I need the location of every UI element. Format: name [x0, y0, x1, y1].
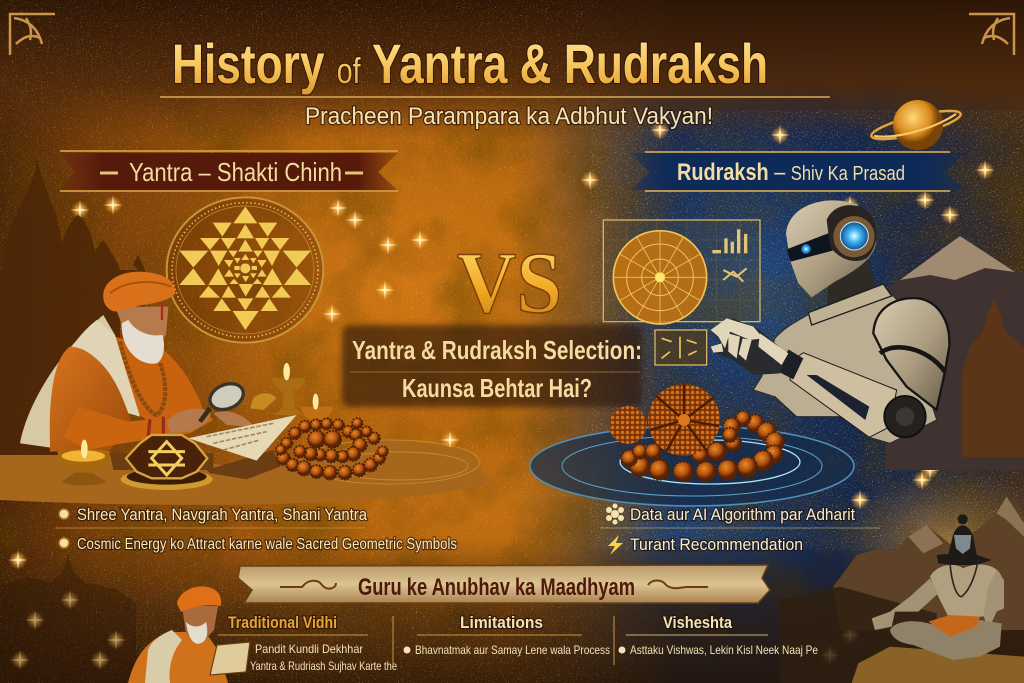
- mountain snow cap: [900, 236, 1015, 280]
- planet icon: [869, 100, 963, 150]
- rudraksh mala: left: [276, 418, 388, 480]
- zodiac wheel: [613, 231, 707, 324]
- shiva figure: [852, 514, 1024, 683]
- column heading: Limitations: [460, 613, 543, 632]
- neck: [827, 260, 875, 307]
- bangles: [148, 417, 163, 436]
- icon: sri yantra: [167, 197, 323, 343]
- divider: [55, 527, 365, 529]
- rudraksh beads: right: [609, 384, 784, 482]
- shawl front: [73, 320, 140, 417]
- hud panel: [603, 220, 760, 365]
- oil lamps: [57, 363, 333, 485]
- rock seat: [852, 647, 1024, 683]
- right bullets: [600, 504, 880, 555]
- title: History of Yantra & Rudraksh: [172, 32, 768, 95]
- torso: [930, 565, 1002, 617]
- beard: [122, 320, 164, 364]
- shawl back: [20, 315, 140, 450]
- left bullets: [55, 505, 457, 553]
- bullet text 4: Turant Recommendation: [630, 535, 803, 554]
- forearm: [790, 353, 897, 437]
- mountains: bottom right: [780, 497, 1024, 683]
- table: golden swirl surface: [0, 438, 490, 505]
- tilak: [158, 305, 165, 320]
- small rudraksh: [609, 406, 647, 444]
- arm: [63, 407, 213, 450]
- platform: blue holographic: [530, 426, 854, 506]
- face: [954, 535, 971, 554]
- bun: [958, 514, 968, 524]
- column heading: Visheshta: [663, 613, 732, 632]
- banner text: yantra: Yantra – Shakti Chinh: [129, 157, 342, 187]
- temple silhouette: right: [962, 298, 1024, 457]
- panel: central question: [342, 325, 642, 407]
- column text line 1: Pandit Kundli Dekhhar: [255, 642, 363, 656]
- small yantra plaque: [121, 435, 213, 490]
- title rule: [160, 96, 830, 98]
- large rudraksh: [648, 384, 720, 456]
- mala necklace: [120, 342, 165, 415]
- mountain: right: [885, 236, 1024, 470]
- small sage figure: [128, 586, 250, 683]
- flourish left: [280, 581, 336, 589]
- magnifying glass: [200, 379, 247, 422]
- village silhouette: bottom left: [0, 555, 136, 683]
- legs: [890, 620, 1002, 660]
- column: traditional vidhi: [218, 613, 397, 673]
- book: [110, 415, 297, 479]
- head: [786, 200, 876, 297]
- column text: Asttaku Vishwas, Lekin Kisl Neek Naaj Pe: [630, 643, 818, 657]
- hands: [167, 409, 254, 433]
- sage figure: writing: [20, 272, 254, 452]
- elbow joint: [884, 396, 926, 437]
- mini bar chart: [712, 229, 747, 282]
- robe: [50, 347, 132, 452]
- headset: [827, 205, 877, 261]
- question line 2: Kaunsa Behtar Hai?: [402, 373, 592, 403]
- robot: [711, 200, 949, 443]
- banner text: rudraksh: Rudraksh – Shiv Ka Prasad: [677, 159, 905, 186]
- panel: yantra banner: [60, 151, 398, 191]
- icon: lightning: [608, 535, 623, 555]
- column: limitations: [393, 613, 610, 665]
- vs: VS: [457, 235, 562, 332]
- column text: Bhavnatmak aur Samay Lene wala Process: [415, 643, 610, 657]
- panel: rudraksh banner: [630, 152, 965, 191]
- icon: chip: [606, 504, 624, 524]
- plaque heading: Guru ke Anubhav ka Maadhyam: [358, 574, 635, 601]
- bullet dot 2: [59, 538, 69, 548]
- flourish right: [648, 580, 708, 588]
- decorative corner ornaments: [10, 14, 1014, 55]
- visor: [787, 233, 833, 262]
- column heading: Traditional Vidhi: [228, 613, 337, 632]
- arm right: [983, 570, 1004, 630]
- temple silhouette: left: [0, 160, 145, 460]
- question line 1: Yantra & Rudraksh Selection:: [352, 335, 642, 365]
- bullet text 2: Cosmic Energy ko Attract karne wale Sacred Geometric Symbols: [77, 536, 457, 553]
- turban: [103, 272, 175, 312]
- cloth: [928, 615, 980, 637]
- subtitle: Pracheen Parampara ka Adbhut Vakyan!: [305, 103, 713, 130]
- bullet text 3: Data aur AI Algorithm par Adharit: [630, 505, 855, 524]
- face: [115, 307, 168, 347]
- bullet dot 1: [59, 509, 69, 519]
- plaque: guru ke anubhav: [238, 565, 770, 603]
- arm left: [872, 578, 938, 630]
- column: visheshta: [614, 613, 818, 665]
- shoulder: [873, 298, 949, 410]
- small data panel: [655, 330, 707, 365]
- necklace: [950, 560, 978, 597]
- divider: [600, 527, 880, 529]
- hair: [937, 525, 992, 565]
- bullet text 1: Shree Yantra, Navgrah Yantra, Shani Yantra: [77, 505, 367, 524]
- torso: [753, 285, 937, 443]
- hand: [711, 318, 787, 375]
- sparkling stars: [8, 120, 995, 670]
- column text line 2: Yantra & Rudriash Sujhav Karte the: [250, 659, 397, 673]
- collar: [808, 284, 892, 325]
- wrist: [778, 349, 803, 379]
